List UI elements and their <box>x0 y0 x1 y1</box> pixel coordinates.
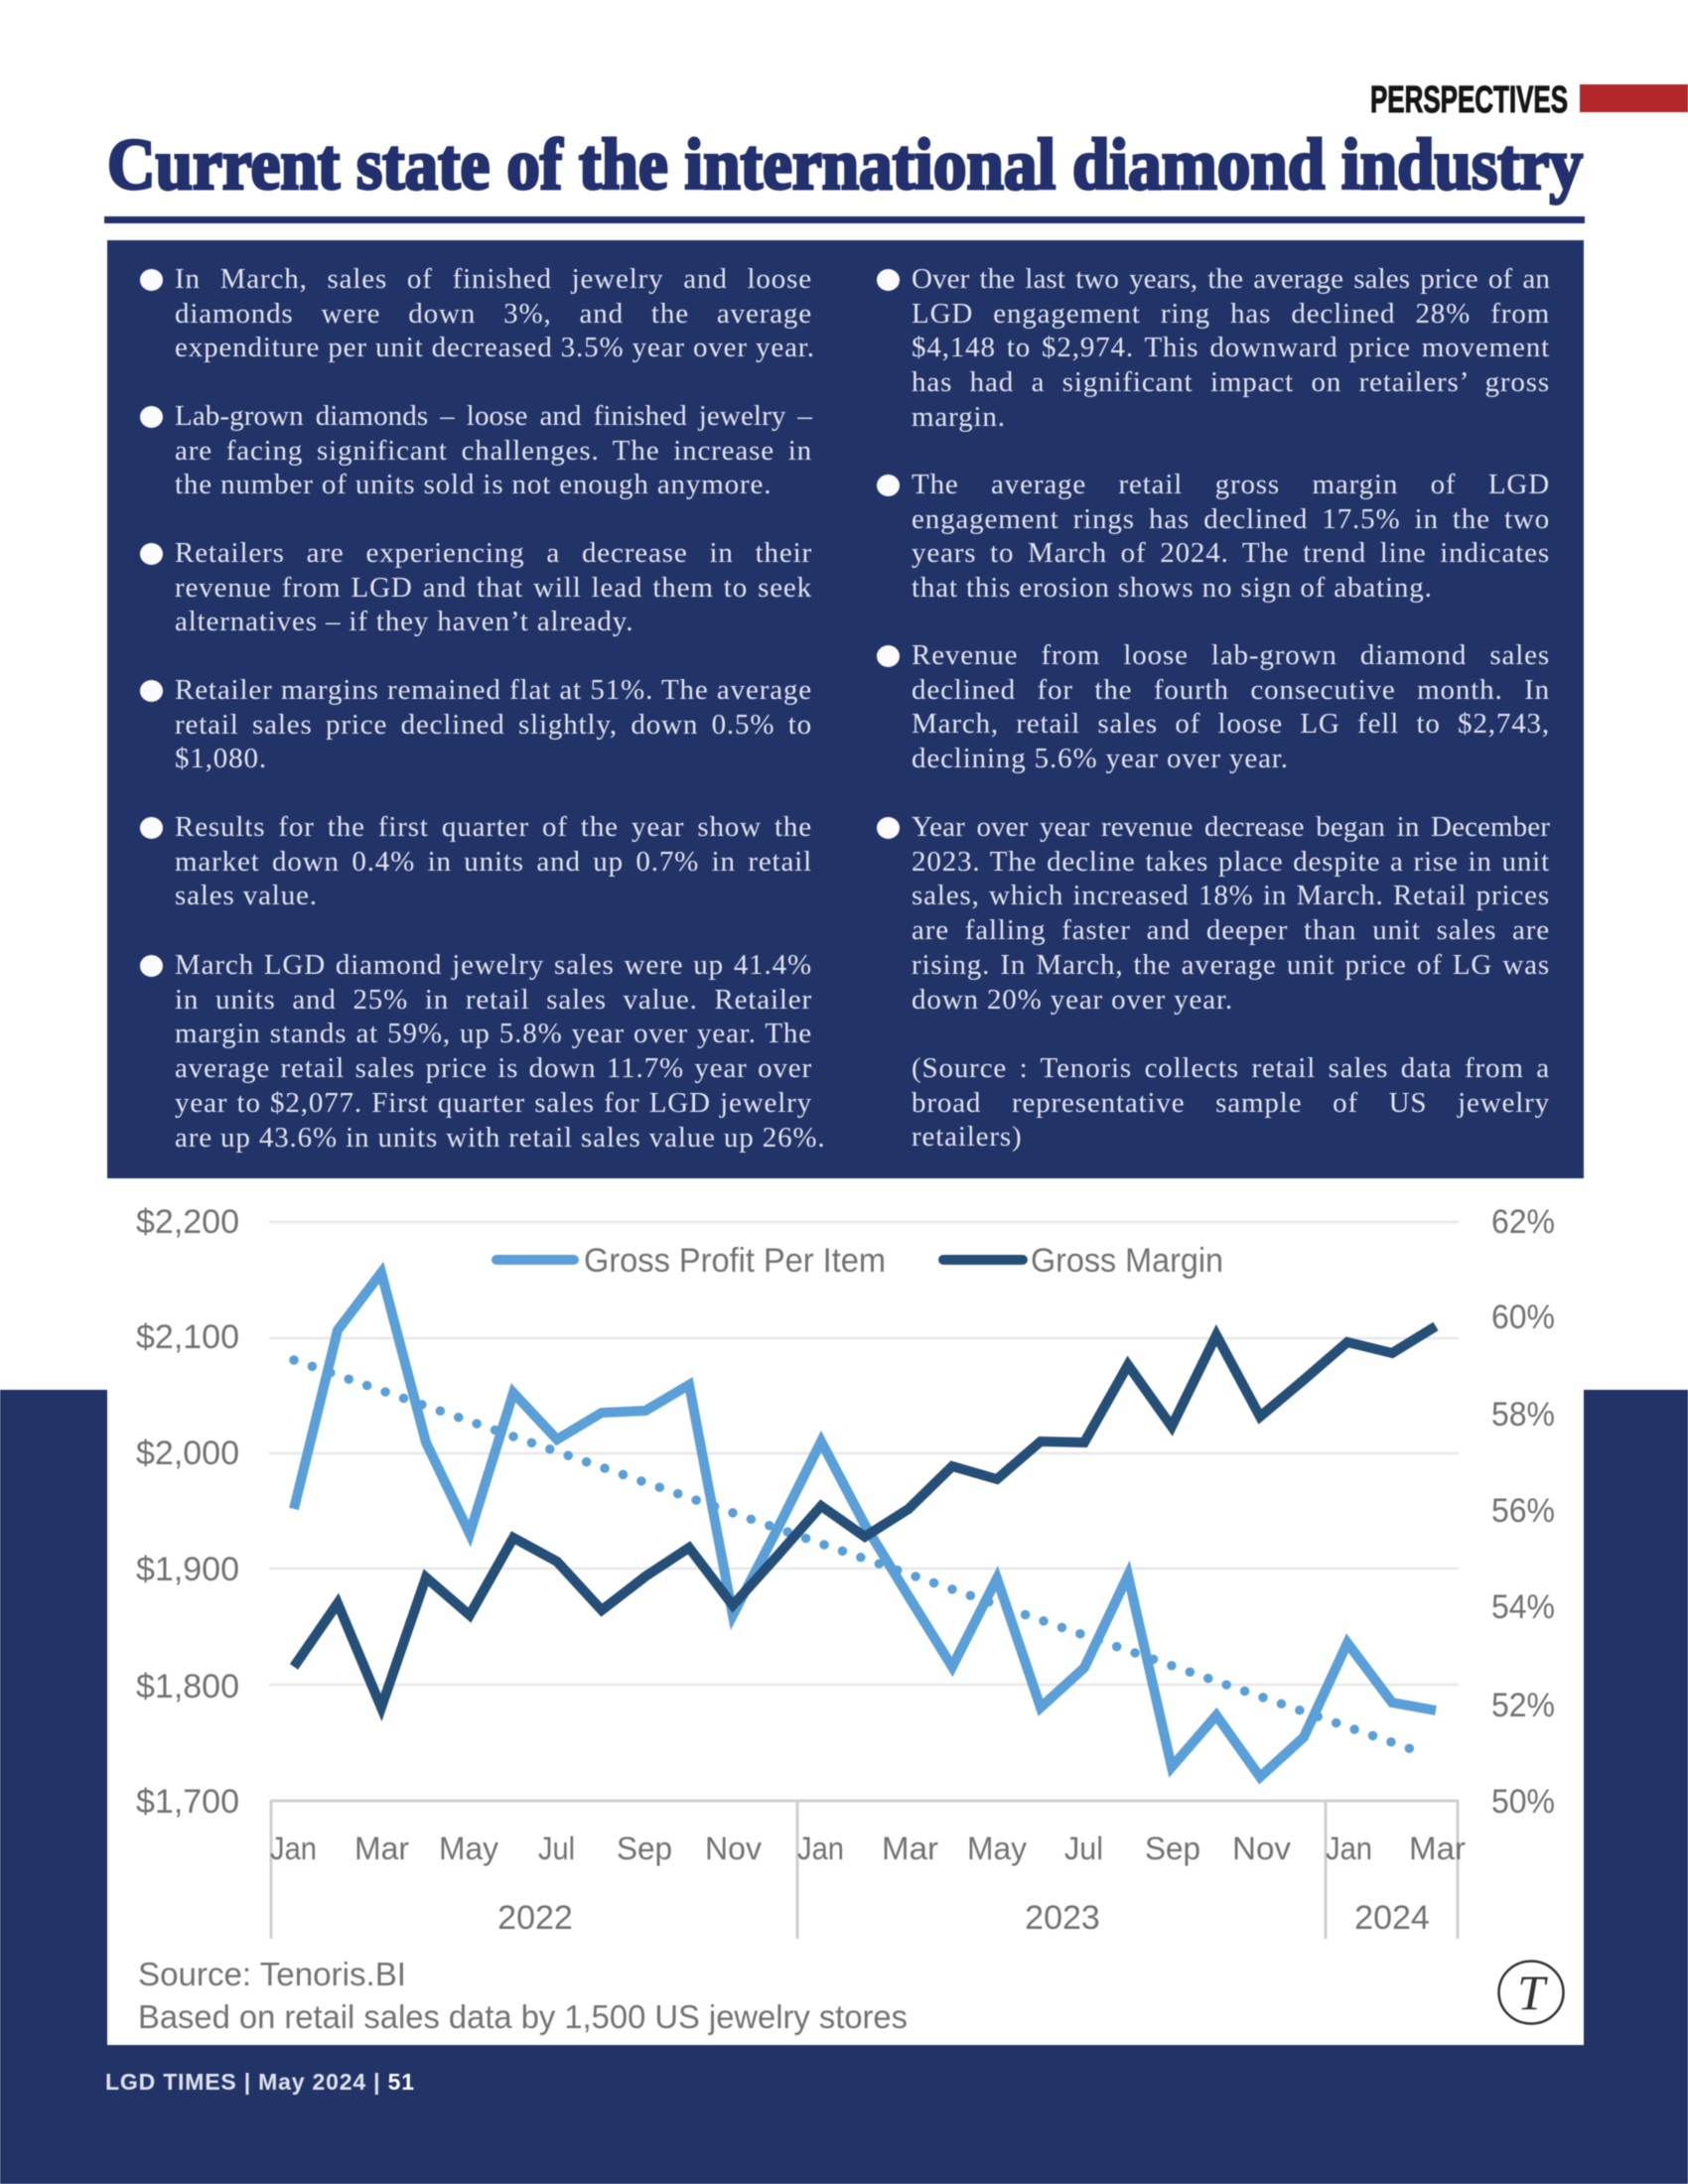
year labels <box>497 1899 1430 1937</box>
chart source <box>138 1956 908 2035</box>
chart source: Based on retail sales data by 1,500 US jewelry stores <box>138 1998 908 2035</box>
bullet: retailer margins <box>139 674 812 774</box>
month labels: Jul <box>1064 1831 1103 1866</box>
bullet: year over year decrease: are falling faster and deeper than unit sales are <box>912 914 1550 946</box>
bullet: gross margin decline: The average retail gross margin of LGD <box>912 469 1550 500</box>
left axis labels: $1,700 <box>136 1783 239 1821</box>
bullet: lab-grown challenges <box>139 400 813 500</box>
bullet: engagement ring price: margin. <box>912 401 1006 433</box>
bullet: retailer margins: $1,080. <box>175 743 267 774</box>
bullet: March LGD jewelry sales: in units and 25% in retail sales value. Retailer <box>175 984 812 1016</box>
bullet: engagement ring price <box>876 263 1550 433</box>
month labels: Nov <box>705 1831 762 1866</box>
month labels: Mar <box>1409 1831 1466 1866</box>
bullet: gross margin decline <box>876 469 1550 604</box>
bullet: retailer margins: retail sales price declined slightly, down 0.5% to <box>175 709 812 741</box>
bullet: first quarter results: market down 0.4% in units and up 0.7% in retail <box>175 846 812 878</box>
trend line <box>294 1360 1426 1754</box>
month labels: Mar <box>882 1831 938 1866</box>
bullet: engagement ring price: Over the last two years, the average sales price of an <box>912 263 1550 295</box>
bullet: year over year decrease: sales, which increased 18% in March. Retail prices <box>912 880 1550 911</box>
bullet: gross margin decline: that this erosion shows no sign of abating. <box>912 572 1433 604</box>
bullet: engagement ring price: has had a significant impact on retailers’ gross <box>912 366 1550 398</box>
month labels: Mar <box>354 1831 409 1866</box>
month labels: Sep <box>1145 1831 1200 1866</box>
bullet: loose lab-grown revenue: declined for the fourth consecutive month. In <box>912 674 1550 706</box>
bullet: loose lab-grown revenue: March, retail sales of loose LG fell to $2,743, <box>912 708 1550 740</box>
month labels <box>270 1831 1466 1866</box>
month labels: Jan <box>797 1831 844 1866</box>
legend: Gross Margin <box>1031 1242 1223 1280</box>
bullet: retailer margins: Retailer margins remained flat at 51%. The average <box>175 674 812 706</box>
legend <box>496 1242 1223 1280</box>
bullet: first quarter results: Results for the first quarter of the year show the <box>175 811 812 843</box>
bullet: year over year decrease: 2023. The decline takes place despite a rise in unit <box>912 846 1550 878</box>
panel: chart card <box>107 1178 1584 2045</box>
bullet: gross margin decline: years to March of 2024. The trend line indicates <box>912 537 1550 569</box>
bullet: first quarter results: sales value. <box>175 880 318 911</box>
bullet: engagement ring price: LGD engagement ring has declined 28% from <box>912 298 1550 330</box>
series: gross profit per item <box>294 1273 1436 1777</box>
right axis labels: 58% <box>1491 1396 1555 1433</box>
bullet: first quarter results <box>139 811 812 911</box>
right axis labels: 56% <box>1491 1492 1555 1530</box>
month labels: May <box>439 1831 498 1866</box>
month labels: Jul <box>538 1831 575 1866</box>
year labels: 2022 <box>497 1899 573 1937</box>
bullet: lab-grown challenges: the number of units sold is not enough anymore. <box>175 469 772 500</box>
source note: retailers) <box>912 1121 1023 1153</box>
right axis labels: 54% <box>1491 1588 1555 1626</box>
year labels: 2024 <box>1354 1899 1430 1937</box>
source note: broad representative sample of US jewelry <box>912 1087 1550 1119</box>
right axis labels: 60% <box>1491 1298 1555 1336</box>
bullet: loose lab-grown revenue: declining 5.6% year over year. <box>912 743 1289 774</box>
bullet: lab-grown challenges: Lab-grown diamonds – loose and finished jewelry – <box>175 400 812 432</box>
bullet: year over year decrease <box>876 811 1551 1016</box>
month labels: Sep <box>617 1831 672 1866</box>
bullet: year over year decrease: down 20% year over year. <box>912 984 1233 1016</box>
month labels: May <box>967 1831 1027 1866</box>
left axis labels: $2,200 <box>136 1203 239 1241</box>
bullet: March sales <box>139 263 815 363</box>
bullet: gross margin decline: engagement rings has declined 17.5% in the two <box>912 503 1550 535</box>
bullet: March LGD jewelry sales: March LGD diamond jewelry sales were up 41.4% <box>175 949 812 981</box>
bullet: retailer revenue <box>139 537 812 637</box>
icon: Tenoris logo: T <box>1517 1965 1548 2020</box>
bullet: March sales: expenditure per unit decreased 3.5% year over year. <box>175 332 815 363</box>
bullet: loose lab-grown revenue <box>876 639 1550 774</box>
source note <box>912 1052 1550 1153</box>
year labels: 2023 <box>1025 1899 1100 1937</box>
bullet: loose lab-grown revenue: Revenue from loose lab-grown diamond sales <box>912 639 1550 671</box>
footer: folio: LGD TIMES | May 2024 | 51 <box>105 2069 414 2095</box>
bullet: March LGD jewelry sales: year to $2,077. First quarter sales for LGD jewelry <box>175 1087 812 1119</box>
left axis labels <box>136 1203 239 1821</box>
source note: (Source : Tenoris collects retail sales data from a <box>912 1052 1550 1084</box>
month labels: Jan <box>1326 1831 1372 1866</box>
left axis labels: $1,900 <box>136 1551 239 1588</box>
bullet: March LGD jewelry sales: margin stands at 59%, up 5.8% year over year. The <box>175 1018 812 1049</box>
month labels: Jan <box>270 1831 317 1866</box>
bullet: March sales: In March, sales of finished jewelry and loose <box>175 263 812 295</box>
right axis labels <box>1491 1203 1555 1821</box>
bullet: March LGD jewelry sales: are up 43.6% in units with retail sales value up 26%. <box>175 1122 826 1154</box>
bullet: March sales: diamonds were down 3%, and the average <box>175 298 812 330</box>
bullet: retailer revenue: Retailers are experiencing a decrease in their <box>175 537 812 569</box>
left axis labels: $2,000 <box>136 1434 239 1472</box>
x axis frame <box>270 1801 1459 1939</box>
bullet: year over year decrease: rising. In March, the average unit price of LG was <box>912 949 1550 981</box>
bullet: engagement ring price: $4,148 to $2,974. This downward price movement <box>912 332 1550 363</box>
left axis labels: $1,800 <box>136 1668 239 1706</box>
chart source: Source: Tenoris.BI <box>138 1956 406 1992</box>
right axis labels: 50% <box>1491 1783 1555 1821</box>
right axis labels: 62% <box>1491 1203 1555 1241</box>
panel: key findings text <box>106 239 1585 1179</box>
series: gross margin <box>294 1326 1436 1707</box>
right axis labels: 52% <box>1491 1687 1555 1724</box>
bullet: year over year decrease: Year over year revenue decrease began in December <box>912 811 1550 843</box>
month labels: Nov <box>1232 1831 1291 1866</box>
bullet: lab-grown challenges: are facing significant challenges. The increase in <box>175 435 812 467</box>
navy background band <box>0 1390 1688 2184</box>
icon: Tenoris logo <box>1499 1962 1563 2023</box>
bullet: retailer revenue: alternatives – if they haven’t already. <box>175 606 633 637</box>
left axis labels: $2,100 <box>136 1318 239 1356</box>
legend: Gross Profit Per Item <box>584 1242 886 1280</box>
bullet: retailer revenue: revenue from LGD and that will lead them to seek <box>175 572 812 604</box>
bullet: March LGD jewelry sales <box>139 949 826 1154</box>
bullet: March LGD jewelry sales: average retail sales price is down 11.7% year over <box>175 1052 812 1084</box>
